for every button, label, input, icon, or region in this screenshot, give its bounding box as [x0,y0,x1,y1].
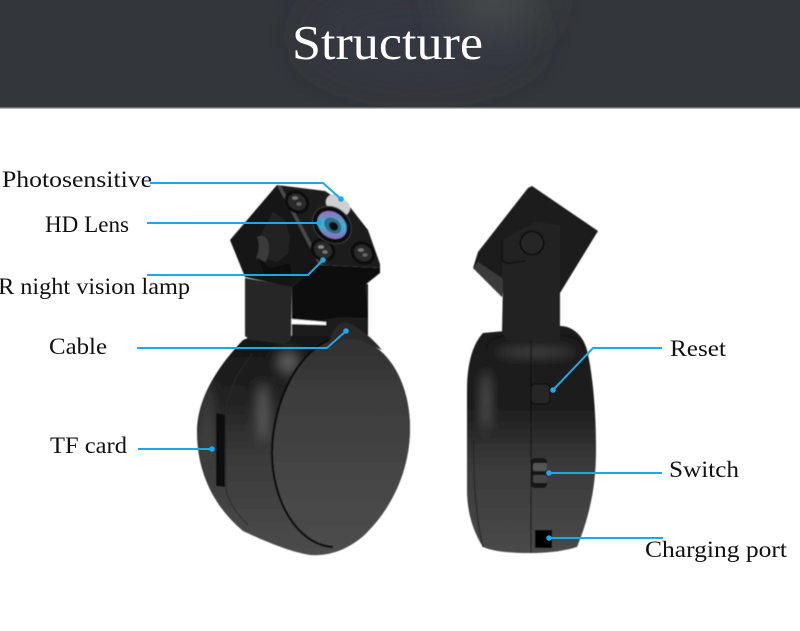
head side [230,185,320,287]
rear body [197,335,410,555]
lens [305,198,359,252]
label: Photosensitive: Photosensitive [2,167,152,192]
body highlights [201,349,300,460]
reset button [531,384,550,404]
label: HD Lens: HD Lens [45,212,129,237]
label: Switch: Switch [669,457,740,482]
pivot [520,232,544,254]
callout lines [137,183,663,538]
IR LED: top [280,186,314,218]
centre seam [530,340,532,553]
side bracket [502,222,560,342]
head front face [277,185,380,268]
bevel strip [277,185,323,265]
side head [473,186,598,297]
label: Cable: Cable [49,334,107,359]
TF slot [216,413,225,487]
arm edge [502,240,525,263]
bracket back [292,284,368,345]
body seam [226,354,252,525]
label: Charging port: Charging port [645,537,788,562]
hinge [256,236,269,262]
camera: side view [467,186,598,553]
title: Structure [292,15,483,70]
cable [327,322,382,350]
white gap [291,319,326,325]
bracket left [245,278,292,344]
camera: front view [197,185,410,555]
photosensor [323,191,353,219]
side body [467,326,596,553]
charging port [535,530,552,548]
callout dots [209,196,556,541]
disc black seam [272,337,343,547]
side highlight [482,346,575,430]
power switch [531,458,547,488]
IR LED: bottom left [306,234,340,266]
arm on head side [258,212,290,262]
label: Reset: Reset [670,336,727,361]
IR LED: bottom right [346,237,380,269]
header banner [0,0,800,108]
label: TF card: TF card [50,433,128,458]
head lower [292,265,380,320]
disc face [272,337,410,548]
